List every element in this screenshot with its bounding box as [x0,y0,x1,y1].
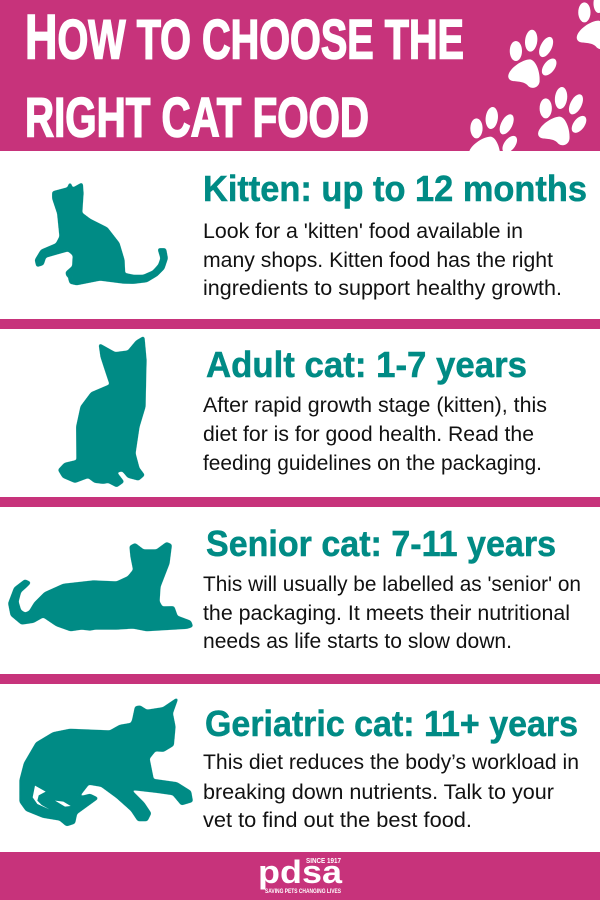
icon: adult cat silhouette [59,338,145,486]
logo: pdsa: pdsa [258,854,342,890]
heading: senior: Senior cat: 7-11 years [206,523,556,564]
text: adult: After rapid growth stage (kitten), this [203,393,547,417]
text: geriatric: breaking down nutrients. Talk to your [203,780,554,804]
heading: kitten: Kitten: up to 12 months [203,168,587,209]
text: geriatric: vet to find out the best food. [203,808,472,832]
logo: pdsa: SAVING PETS CHANGING LIVES [265,888,341,895]
text: kitten: Look for a 'kitten' food available in [203,219,523,243]
icon: kitten silhouette [36,184,167,284]
text: geriatric [203,750,579,832]
icon: geriatric cat silhouette [21,699,192,825]
text: adult: diet for is for good health. Read the [203,422,534,446]
header banner [0,0,600,165]
title [25,2,464,148]
divider bands [0,319,600,684]
icon: senior cat silhouette [9,543,192,630]
text: senior [203,572,581,653]
panel: geriatric [21,699,579,832]
text: adult: feeding guidelines on the packaging. [203,451,542,475]
text: adult [203,393,547,475]
logo: pdsa: SINCE 1917 [306,858,341,865]
icon: paw prints [469,0,600,165]
panel: senior [9,523,581,653]
text: kitten: ingredients to support healthy growth. [203,276,562,300]
panel: kitten [36,168,587,300]
text: geriatric: This diet reduces the body’s workload in [203,750,579,774]
text: senior: needs as life starts to slow down. [203,629,512,653]
heading: adult: Adult cat: 1-7 years [206,344,527,385]
text: senior: This will usually be labelled as 'senior' on [203,572,581,596]
panel: adult [59,338,547,486]
text: kitten [203,219,562,300]
heading: geriatric: Geriatric cat: 11+ years [205,703,578,744]
title: RIGHT CAT FOOD [25,86,369,148]
text: kitten: many shops. Kitten food has the right [203,248,553,272]
text: senior: the packaging. It meets their nutritional [203,601,570,625]
footer [0,852,600,900]
